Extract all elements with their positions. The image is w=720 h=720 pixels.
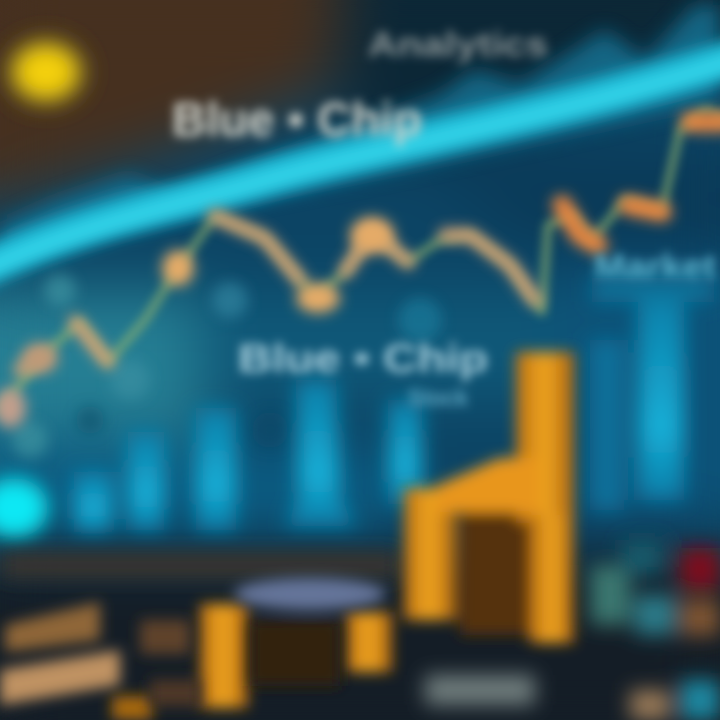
- central oval disc: [234, 578, 386, 686]
- orange chart highlights: [0, 217, 394, 428]
- top right label: Analytics: [368, 26, 548, 64]
- mottled teal texture: [12, 274, 442, 458]
- front stack: [200, 604, 248, 708]
- bar 7: [638, 295, 684, 500]
- line base: [0, 110, 720, 410]
- line peach segments: [20, 216, 535, 370]
- heading label: Blue • Chip: [172, 94, 422, 147]
- bar top 7: [592, 278, 714, 302]
- tall stack: [516, 352, 574, 522]
- cyan trend band: [0, 56, 720, 272]
- bar 2: [128, 432, 164, 530]
- stack shadow: [460, 510, 540, 635]
- small label: Stock: [408, 385, 469, 412]
- bar 4: [284, 380, 358, 526]
- bridge: [436, 458, 540, 512]
- blue bar columns: [74, 278, 714, 532]
- sun glow: [2, 34, 90, 110]
- left stack: [404, 488, 456, 620]
- lower tall stack: [530, 515, 574, 643]
- bar 3: [196, 408, 236, 530]
- bar 1: [74, 472, 112, 532]
- right label: Market: [594, 248, 716, 286]
- bottom right cluster: [425, 540, 720, 720]
- gold coin stacks: [112, 352, 574, 720]
- cyan glow block: [0, 478, 48, 538]
- line orange segments: [562, 122, 720, 245]
- centre label: Blue • Chip: [238, 337, 488, 381]
- bar 6: [590, 340, 624, 510]
- orange line chart: [0, 110, 720, 410]
- bottom shelf band: [0, 552, 400, 578]
- foreground coin: [112, 696, 152, 720]
- background skyline above trend band: [0, 5, 720, 265]
- bar 5: [388, 400, 422, 504]
- labels: [172, 26, 716, 412]
- small stack: [346, 612, 392, 672]
- bottom left tan bars: [0, 602, 200, 706]
